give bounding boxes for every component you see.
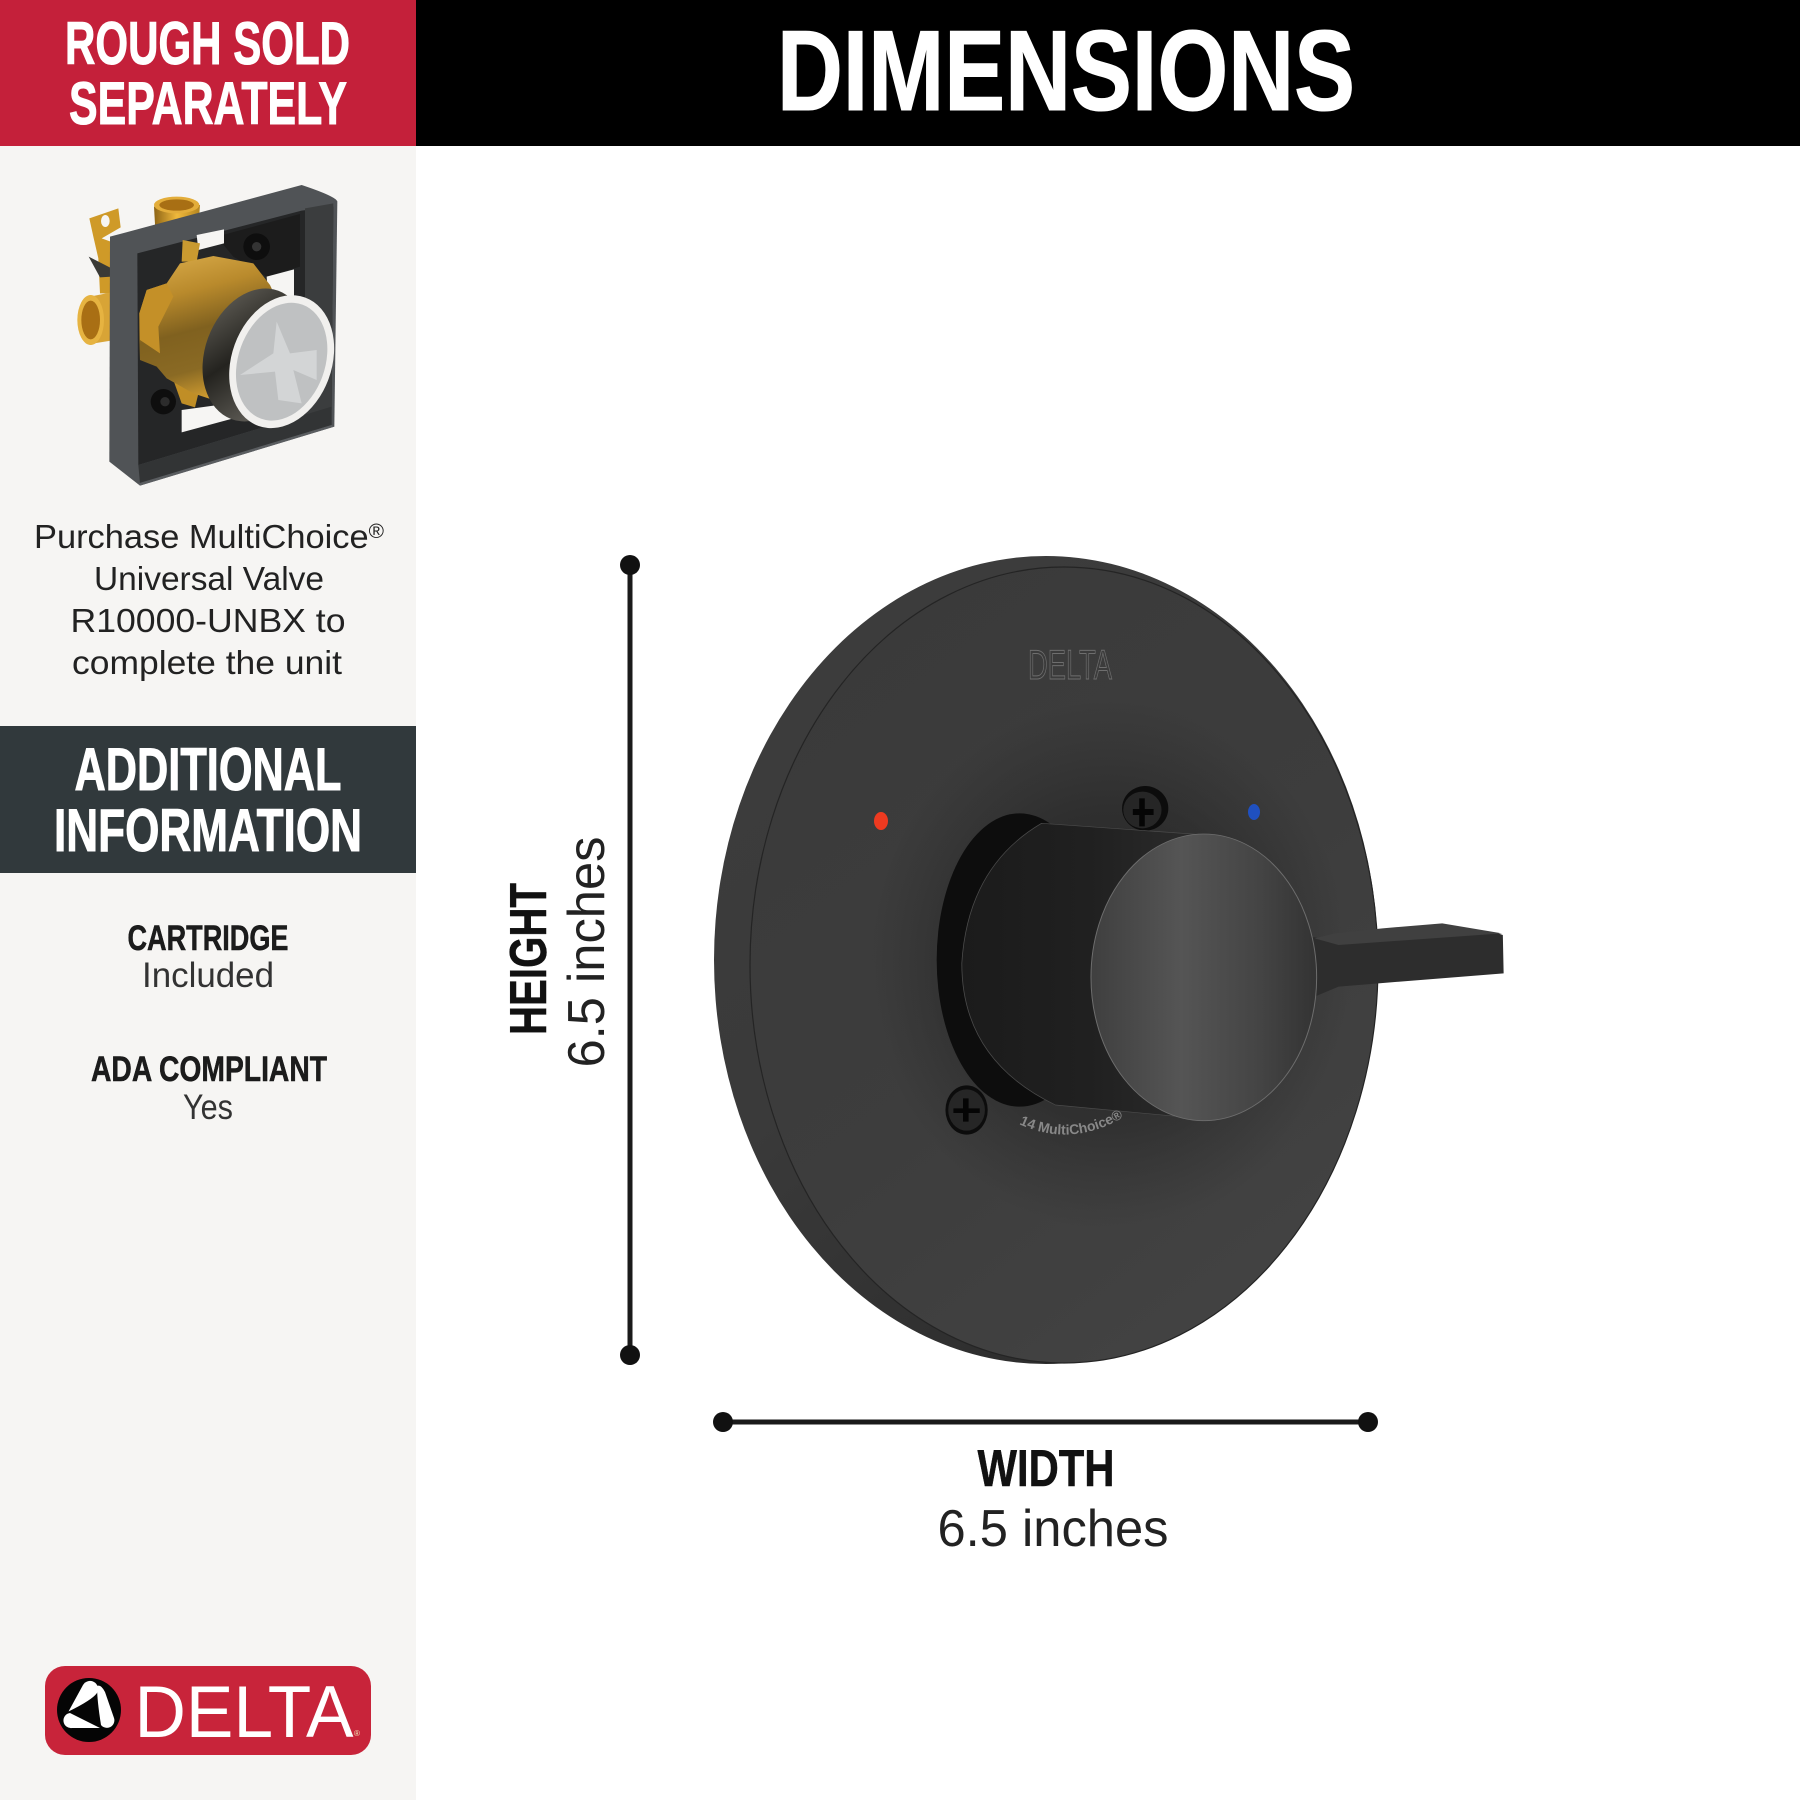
frame opening <box>137 207 333 465</box>
frame <box>109 185 337 486</box>
info: cartridge <box>128 919 288 995</box>
trim plate <box>714 556 1378 1364</box>
info: ADA compliant <box>91 1050 327 1127</box>
info: cartridge: Included <box>142 956 274 995</box>
knob barrel <box>962 823 1215 1120</box>
hot indicator <box>874 812 888 830</box>
sidebar panel background <box>0 0 416 1800</box>
top pipe <box>154 205 200 253</box>
logo: Delta: ® <box>354 1729 360 1738</box>
frame windows <box>197 229 224 250</box>
text block: purchase note: Universal Valve <box>94 560 324 597</box>
text block: purchase note: R10000-UNBX to <box>70 602 346 639</box>
top screw <box>1122 786 1168 831</box>
threaded stems <box>182 240 200 262</box>
label: width: WIDTH <box>978 1440 1114 1498</box>
bottom screw <box>945 1085 988 1135</box>
label: height: 6.5 inches <box>558 836 616 1068</box>
text block: purchase note: ® <box>369 521 384 543</box>
banner: additional information <box>0 726 416 873</box>
mounting screw grommets <box>243 233 270 260</box>
brass tab <box>89 208 121 293</box>
brass body <box>139 256 283 407</box>
info: cartridge: CARTRIDGE <box>128 919 288 958</box>
handle assembly <box>937 786 1504 1135</box>
product: shower valve trim <box>714 556 1504 1364</box>
banner: additional information: INFORMATION <box>54 797 362 864</box>
banner: rough sold separately: SEPARATELY <box>69 70 347 137</box>
knob face <box>1091 834 1317 1121</box>
banner: rough sold separately <box>0 0 416 146</box>
title: dimensions: DIMENSIONS <box>777 8 1355 135</box>
dimension line: height <box>620 555 640 1365</box>
chrome ring <box>211 280 352 443</box>
text block: purchase note: Purchase MultiChoice <box>34 518 355 555</box>
icon: rough-in valve product photo <box>77 185 352 486</box>
cold indicator <box>1248 804 1260 820</box>
brand mark on plate: DELTA <box>1028 641 1112 688</box>
label: width <box>938 1440 1168 1558</box>
label: width: 6.5 inches <box>938 1500 1168 1558</box>
title: dimensions <box>416 0 1800 146</box>
mount shadow ring <box>937 813 1103 1107</box>
banner: additional information: ADDITIONAL <box>74 736 342 803</box>
bracket <box>217 214 300 277</box>
text block: purchase note <box>34 518 384 681</box>
white cap <box>220 290 343 433</box>
logo: Delta <box>45 1666 371 1755</box>
left pipe <box>90 292 115 344</box>
dimension line: width <box>713 1412 1378 1432</box>
label: height: HEIGHT <box>500 883 558 1035</box>
text block: purchase note: complete the unit <box>72 644 342 681</box>
knob shadow <box>870 700 1350 1230</box>
info: ADA compliant: ADA COMPLIANT <box>91 1050 327 1089</box>
label: height <box>500 836 616 1068</box>
model mark: 14 MultiChoice® <box>1020 1110 1122 1135</box>
lever handle <box>1311 923 1504 997</box>
collar <box>185 274 325 436</box>
logo: Delta: DELTA <box>134 1672 354 1753</box>
banner: rough sold separately: ROUGH SOLD <box>65 10 350 77</box>
info: ADA compliant: Yes <box>183 1088 233 1127</box>
